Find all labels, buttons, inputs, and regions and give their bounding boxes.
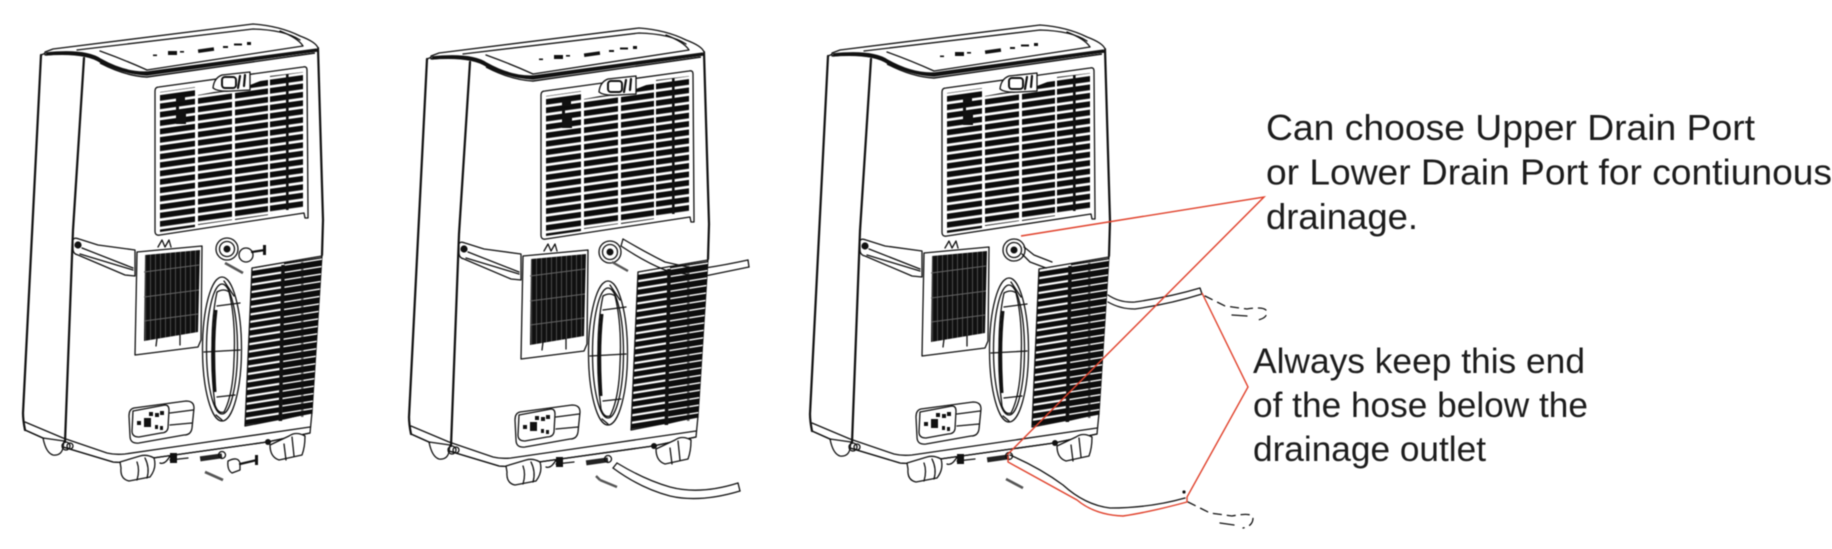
icon: upper drain port xyxy=(1003,239,1025,261)
text: drain port note: drainage. xyxy=(1266,196,1418,237)
arrow: lower port direction xyxy=(1006,479,1023,488)
lower hose with dashed end xyxy=(1010,455,1253,528)
illustration: second unit, hoses attached xyxy=(409,28,749,499)
callout leader: hose ends xyxy=(1008,293,1248,516)
upper drain plug xyxy=(239,245,266,262)
icon: upper drain port xyxy=(599,241,621,263)
callout leader: drain ports xyxy=(1007,197,1264,455)
text: drain port note: or Lower Drain Port for contiunous xyxy=(1266,152,1832,192)
illustration: first unit, drain plugs removed xyxy=(23,24,323,481)
arrow: lower plug direction xyxy=(205,472,223,480)
arrow: upper plug direction xyxy=(225,263,243,273)
text: drain port note: Can choose Upper Drain Port xyxy=(1266,107,1755,148)
lower hose xyxy=(613,463,740,499)
lower drain plug xyxy=(228,455,258,473)
illustration: third unit, continuous drainage xyxy=(810,25,1267,528)
arrow: upper port direction xyxy=(612,262,628,271)
text: hose end note: drainage outlet xyxy=(1253,430,1486,469)
icon: upper drain port xyxy=(216,238,238,260)
arrow: lower port direction xyxy=(596,476,617,487)
upper hose with dashed end xyxy=(1022,247,1267,320)
text: hose end note: Always keep this end xyxy=(1253,342,1585,381)
text: hose end note: of the hose below the xyxy=(1253,386,1588,425)
upper hose xyxy=(621,239,749,276)
